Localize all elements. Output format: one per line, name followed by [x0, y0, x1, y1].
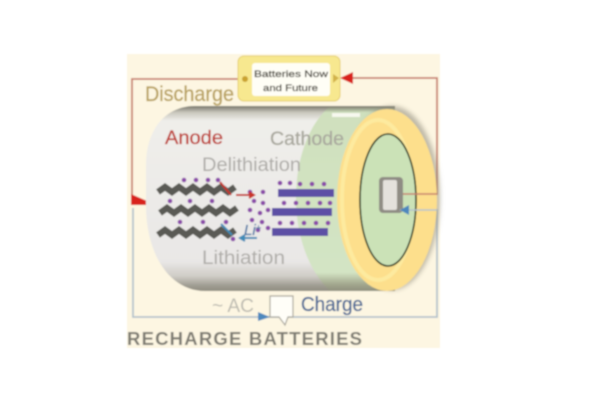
label: Li+: Li [244, 222, 256, 239]
charge ion arrows [221, 224, 257, 241]
title: RECHARGE BATTERIES [127, 328, 362, 349]
charger box [270, 296, 293, 325]
label: ~ AC: ~ AC [212, 296, 254, 317]
blue arrowhead bottom [258, 312, 270, 321]
top highlight [332, 113, 360, 117]
label: Cathode: Cathode [270, 129, 344, 150]
battery cylinder [146, 106, 440, 291]
label: Anode: Anode [165, 128, 223, 149]
end cap shadow [344, 106, 440, 290]
label: Batteries Now and Future box [238, 56, 340, 101]
yellow end cap [337, 109, 437, 291]
red arrowhead left [131, 194, 147, 205]
cathode body [296, 106, 395, 291]
label: Li+: + [256, 223, 261, 233]
discharge ion arrows [220, 182, 254, 198]
terminal [379, 177, 403, 213]
label: Charge: Charge [301, 294, 363, 316]
label: Discharge: Discharge [145, 83, 234, 106]
anode body [146, 106, 330, 291]
terminal connector lines [403, 193, 437, 195]
lithium ions [168, 178, 332, 241]
discharge circuit line [132, 78, 437, 198]
label: Lithiation: Lithiation [202, 248, 285, 269]
charge circuit line [133, 208, 437, 317]
label: Batteries Now and Future box: and Future [263, 83, 318, 94]
green end face [360, 134, 416, 266]
cream background panel [127, 54, 440, 348]
red arrowhead right [340, 72, 353, 84]
anode layers [158, 187, 237, 235]
cathode layers [272, 193, 334, 232]
label: Batteries Now and Future box: Batteries Now [254, 69, 328, 80]
terminal blue arrow [400, 205, 409, 215]
label: Delithiation: Delithiation [202, 155, 301, 176]
